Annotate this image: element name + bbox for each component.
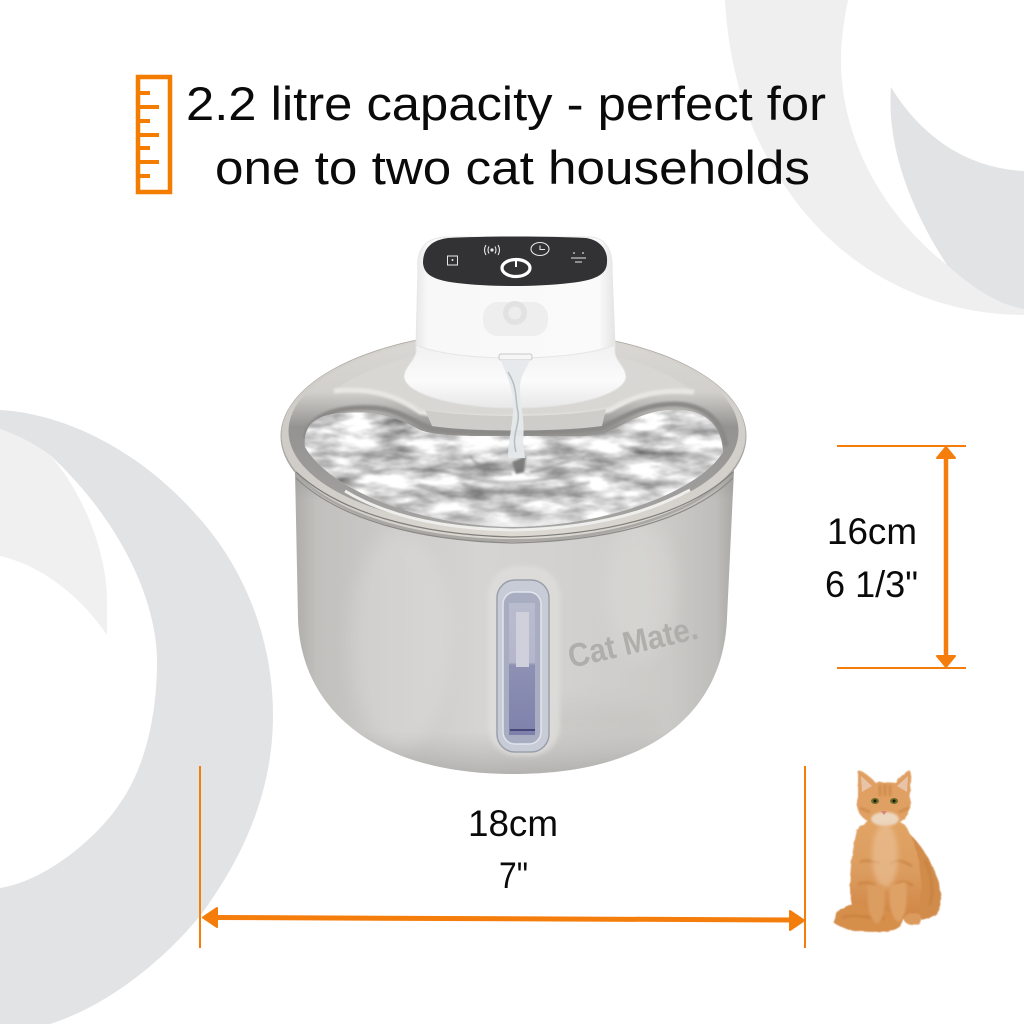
cat tail [834,904,903,932]
background swoosh: top right [725,0,1024,315]
title: 2.2 litre capacity - perfect for [186,77,826,130]
cat head [857,771,911,826]
control panel [423,236,607,286]
width label [468,803,558,896]
height dimension arrow [837,446,966,668]
fountain body [295,470,734,774]
cat face [871,798,899,826]
title [186,77,826,194]
product: water fountain [280,236,746,774]
height label: 16cm [827,511,917,552]
brand logo: Cat Mate. [564,609,701,675]
panel icons [448,242,586,276]
height label [825,511,918,605]
motion sensor [483,301,548,336]
cat chest and torso [850,818,921,921]
water stream [501,360,530,458]
cat chest highlight [872,824,898,888]
cat haunch paw [904,913,922,925]
cat back and haunch [890,830,941,922]
illustration: orange cat [834,771,941,932]
icon: ruler [138,77,170,192]
control tower [404,236,626,408]
cat fur markings [842,784,932,918]
tower base [404,340,626,408]
background swoosh: bottom left [0,410,273,1024]
cat ears inner [861,776,908,792]
height label: 6 1/3" [825,564,918,605]
cat front legs [867,882,907,924]
spout [499,354,532,360]
width dimension arrow [200,766,805,948]
water surface [304,410,723,527]
tray shelf [305,345,726,446]
title: one to two cat households [215,141,810,194]
width label: 7" [499,855,528,896]
width label: 18cm [468,803,558,844]
tray rim [280,330,746,543]
tower upper body [416,237,615,358]
water level window [488,566,560,756]
